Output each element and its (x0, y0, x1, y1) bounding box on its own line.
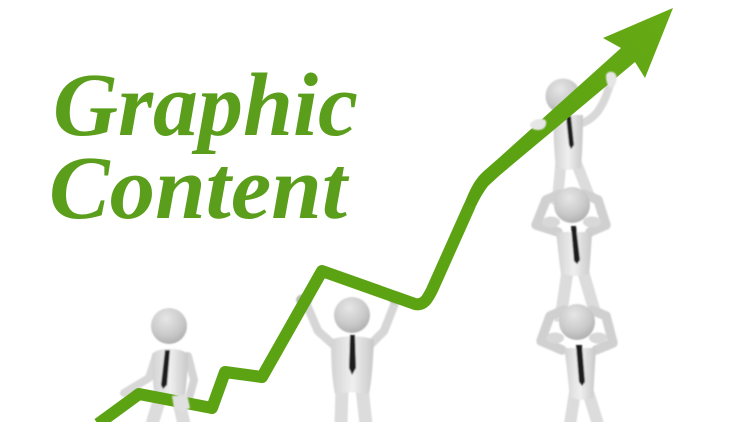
title line: Content: Content (49, 139, 350, 238)
head (546, 78, 580, 114)
growth line (98, 205, 470, 422)
head (559, 304, 595, 340)
right hand (388, 292, 404, 304)
legs (560, 268, 596, 322)
tie (349, 335, 356, 375)
torso (564, 348, 596, 400)
legs (341, 388, 366, 422)
tie (566, 116, 574, 149)
head (334, 297, 370, 333)
tie (571, 226, 580, 264)
head (151, 308, 187, 344)
legs (570, 392, 598, 422)
arms (306, 303, 395, 347)
tie (576, 345, 585, 386)
head (554, 187, 590, 223)
growth arrow head and tapered shaft (464, 8, 673, 208)
legs (557, 162, 590, 205)
torso (554, 115, 583, 170)
figure: seated man behind the graph (124, 308, 194, 422)
figure: man holding the graph overhead (296, 292, 404, 422)
left hand (296, 294, 312, 306)
right arm (188, 356, 194, 402)
title line: Graphic: Graphic (53, 56, 358, 155)
legs (152, 398, 184, 422)
torso (556, 232, 592, 276)
title: Graphic Content (49, 56, 358, 238)
figure: middle man on the tower (536, 187, 606, 322)
hands (546, 332, 564, 344)
arms behind head (541, 310, 613, 350)
hand: top man's right hand gripping the arrow (606, 72, 617, 88)
hand: top man's left hand gripping the arrow (530, 119, 546, 130)
figure: top man on the tower, behind the arrow (546, 78, 610, 205)
arms behind head (536, 194, 606, 232)
tie (161, 350, 170, 389)
hands (542, 216, 560, 228)
torso (331, 336, 374, 394)
hand: seated man's hand over the line (172, 394, 190, 412)
raised arm (580, 84, 610, 124)
figure: bottom man on the tower (541, 304, 613, 422)
torso (152, 349, 188, 404)
left arm (124, 356, 156, 393)
